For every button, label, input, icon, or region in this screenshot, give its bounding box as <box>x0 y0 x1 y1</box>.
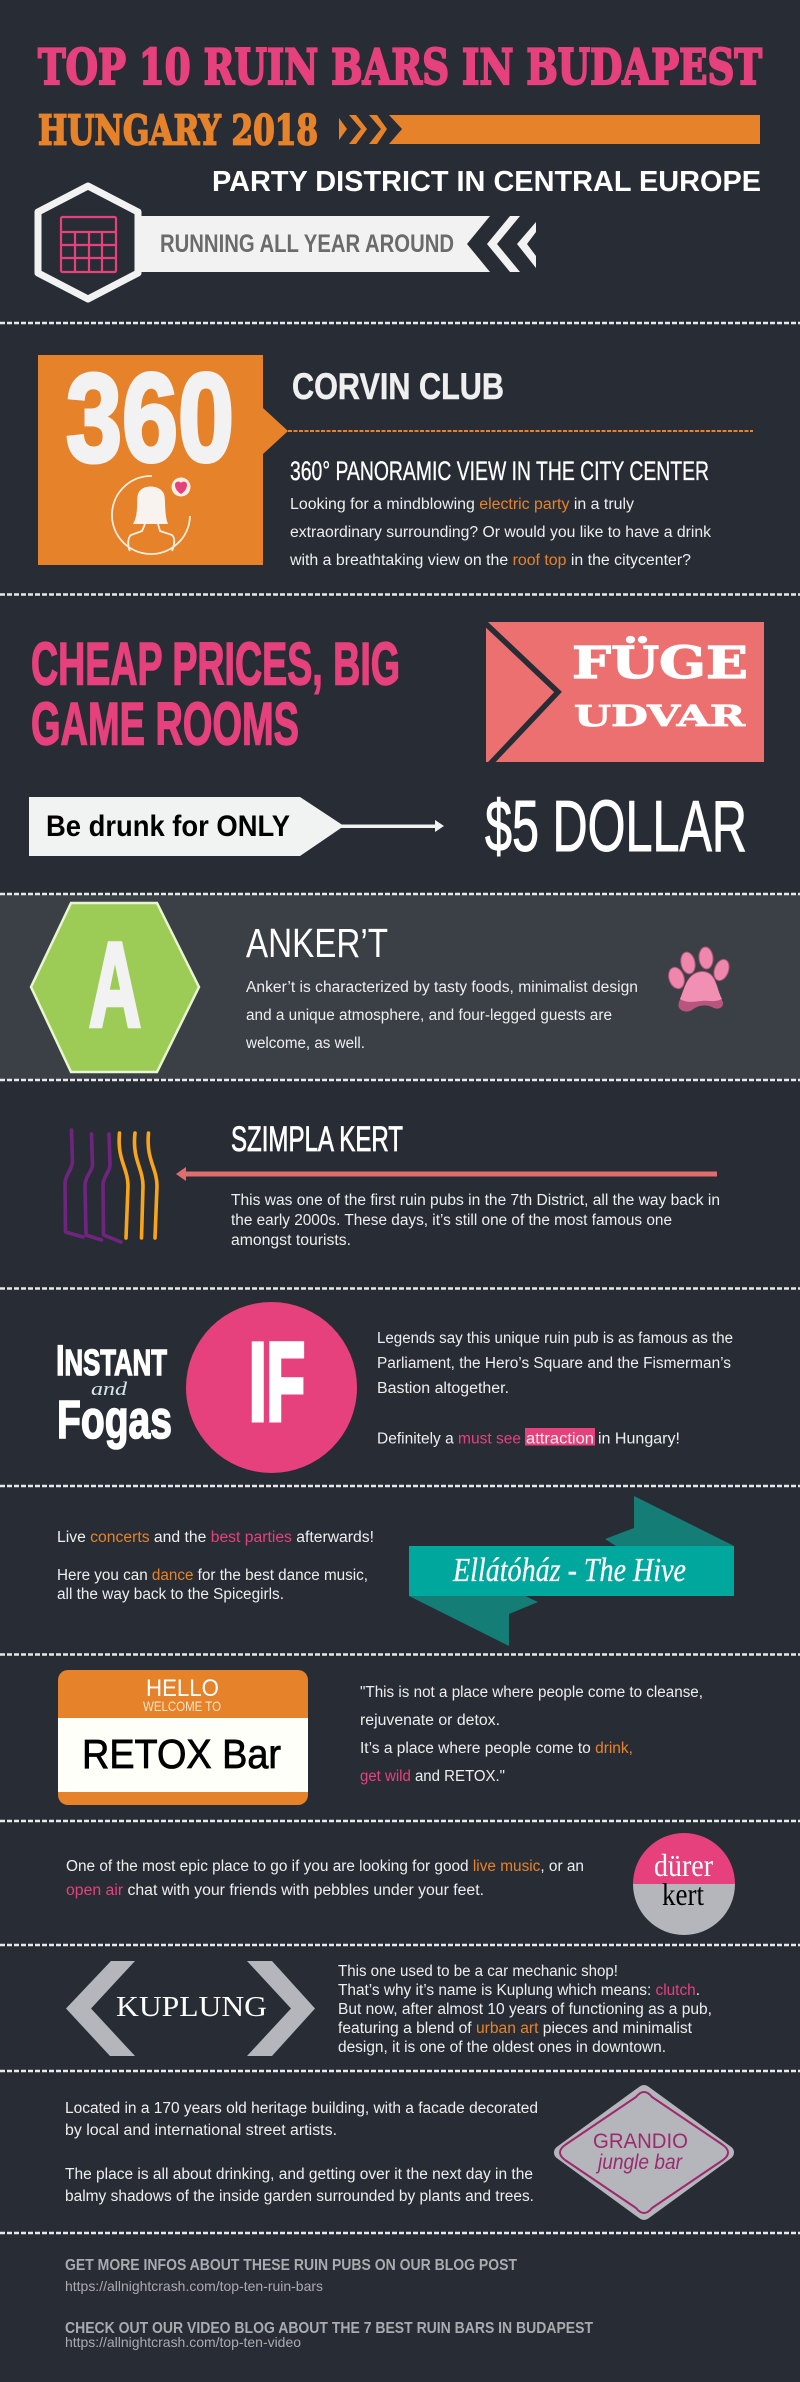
quote: rejuvenate or detox. <box>360 1712 500 1729</box>
highlight <box>525 1428 595 1446</box>
panel: Retox Bar <box>58 1670 703 1805</box>
circle logo: dürer <box>654 1847 713 1883</box>
panel: Füge Udvar <box>29 622 764 867</box>
panel: Corvin Club <box>38 349 753 569</box>
circle logo IF: IF <box>249 1321 305 1444</box>
blog post: GET MORE INFOS ABOUT THESE RUIN PUBS ON OUR BLOG POST <box>65 2257 517 2274</box>
body text: This was one of the first ruin pubs in the 7th District, all the way back in <box>231 1192 720 1209</box>
body text <box>66 1858 584 1899</box>
arrow <box>176 1167 717 1181</box>
orange box with 360: 360 <box>66 349 234 488</box>
icon: calendar in hexagon <box>38 186 138 299</box>
body text <box>245 979 638 1052</box>
body text: balmy shadows of the inside garden surrounded by plants and trees. <box>65 2188 534 2205</box>
body text: amongst tourists. <box>231 1232 351 1249</box>
diamond logo: jungle bar <box>595 2151 683 2174</box>
arrow label: be drunk for only: Be drunk for ONLY <box>46 810 290 843</box>
body text: This one used to be a car mechanic shop! <box>338 1963 618 1980</box>
diamond logo: GRANDIO <box>593 2130 688 2153</box>
body text: all the way back to the Spicegirls. <box>57 1586 284 1603</box>
video url: https://allnightcrash.com/top-ten-video <box>65 2334 301 2350</box>
logo: Füge Udvar: UDVAR <box>574 699 746 733</box>
circle logo IF <box>186 1302 357 1473</box>
logo text: Fogas <box>57 1390 172 1450</box>
banner: running all year around <box>135 216 536 272</box>
panel: Instant and Fogas <box>56 1302 733 1473</box>
body text <box>231 1192 720 1249</box>
body text: Located in a 170 years old heritage building, with a facade decorated <box>65 2100 538 2117</box>
body text: Looking for a mindblowing electric party in a truly <box>290 496 634 513</box>
body text: and a unique atmosphere, and four-legged guests are <box>246 1007 612 1024</box>
hexagon logo: A <box>89 918 141 1052</box>
body text: in Hungary! <box>598 1430 680 1448</box>
body text: Live concerts and the best parties afterwards! <box>57 1529 374 1546</box>
body text <box>377 1330 733 1448</box>
heading: ANKER’T <box>246 920 388 966</box>
diamond logo <box>560 2092 728 2213</box>
icon: bottles <box>65 1130 157 1242</box>
body text: featuring a blend of urban art pieces and minimalist <box>338 2020 693 2037</box>
body text: by local and international street artists. <box>65 2122 337 2139</box>
logo text <box>56 1337 172 1450</box>
body text: But now, after almost 10 years of functioning as a pub, <box>338 2001 712 2018</box>
ribbon logo: Ellátóház - The Hive <box>452 1552 686 1589</box>
body text: Bastion altogether. <box>377 1380 509 1397</box>
body text: design, it is one of the oldest ones in downtown. <box>338 2039 666 2056</box>
panel: Szimpla Kert <box>65 1120 720 1249</box>
name tag: WELCOME TO <box>143 1698 221 1714</box>
body text: open air chat with your friends with pebbles under your feet. <box>66 1882 484 1899</box>
logo: Füge Udvar: FÜGE <box>572 635 748 689</box>
body text: Definitely a must see <box>377 1430 521 1448</box>
name tag: HELLO <box>146 1675 219 1702</box>
arrow label: be drunk for only <box>29 797 344 856</box>
body text: with a breathtaking view on the roof top in the citycenter? <box>289 552 691 569</box>
circle logo: kert <box>662 1876 704 1912</box>
icon: lamp and heart <box>112 476 190 554</box>
hexagon logo <box>31 903 199 1072</box>
logo <box>66 1961 315 2056</box>
panel: Kuplung <box>66 1961 712 2056</box>
panel: Grandio <box>65 2092 728 2213</box>
heading: cheap prices: CHEAP PRICES, BIG <box>31 630 400 698</box>
body text <box>65 2100 538 2205</box>
video blog: CHECK OUT OUR VIDEO BLOG ABOUT THE 7 BEST RUIN BARS IN BUDAPEST <box>65 2320 593 2337</box>
body text <box>338 1963 712 2056</box>
banner: running all year around: RUNNING ALL YEAR AROUND <box>160 230 454 258</box>
logo: Füge Udvar <box>484 622 764 764</box>
body text: Here you can dance for the best dance music, <box>57 1567 368 1584</box>
ribbon logo <box>409 1496 734 1646</box>
subtitle: Hungary 2018: HUNGARY 2018 <box>38 106 318 154</box>
body text: The place is all about drinking, and getting over it the next day in the <box>65 2166 533 2183</box>
quote <box>360 1684 703 1785</box>
body text: Legends say this unique ruin pub is as famous as the <box>377 1330 733 1347</box>
heading: cheap prices: GAME ROOMS <box>31 690 299 758</box>
heading: SZIMPLA KERT <box>231 1120 403 1159</box>
logo text: and <box>91 1379 128 1400</box>
body text: Anker’t is characterized by tasty foods, minimalist design <box>246 979 638 996</box>
arrow bar <box>339 115 760 144</box>
circle logo <box>633 1833 735 1935</box>
body text: the early 2000s. These days, it’s still one of the most famous one <box>231 1212 672 1229</box>
body text: Parliament, the Hero’s Square and the Fismerman’s <box>377 1355 731 1372</box>
body text: extraordinary surrounding? Or would you like to have a drink <box>290 524 711 541</box>
body text: welcome, as well. <box>245 1035 365 1052</box>
icon: paw <box>666 946 732 1012</box>
body text <box>289 496 711 569</box>
panel: The Hive <box>57 1496 734 1646</box>
heading: Corvin Club: CORVIN CLUB <box>292 366 504 407</box>
name tag <box>58 1670 308 1805</box>
body text: One of the most epic place to go if you are looking for good live music, or an <box>66 1858 584 1875</box>
orange box with 360 <box>38 349 288 565</box>
quote: get wild and RETOX." <box>360 1768 505 1785</box>
panel: Anker't <box>31 903 732 1072</box>
body text: attraction <box>526 1430 594 1448</box>
body text <box>57 1529 374 1603</box>
header panel <box>38 38 762 299</box>
quote: It’s a place where people come to drink, <box>360 1740 633 1757</box>
footer links <box>65 2257 593 2350</box>
panel: Dürer Kert <box>66 1833 735 1935</box>
heading: cheap prices <box>31 630 400 758</box>
blog url: https://allnightcrash.com/top-ten-ruin-bars <box>65 2278 323 2294</box>
name tag: RETOX Bar <box>82 1731 281 1777</box>
logo: KUPLUNG <box>116 1991 267 2023</box>
arrow <box>340 820 444 832</box>
heading: party district: PARTY DISTRICT IN CENTRAL EUROPE <box>212 166 761 198</box>
logo text: INSTANT <box>56 1337 167 1385</box>
body text: That’s why it’s name is Kuplung which means: clutch. <box>338 1982 700 1999</box>
quote: "This is not a place where people come to cleanse, <box>360 1684 703 1701</box>
